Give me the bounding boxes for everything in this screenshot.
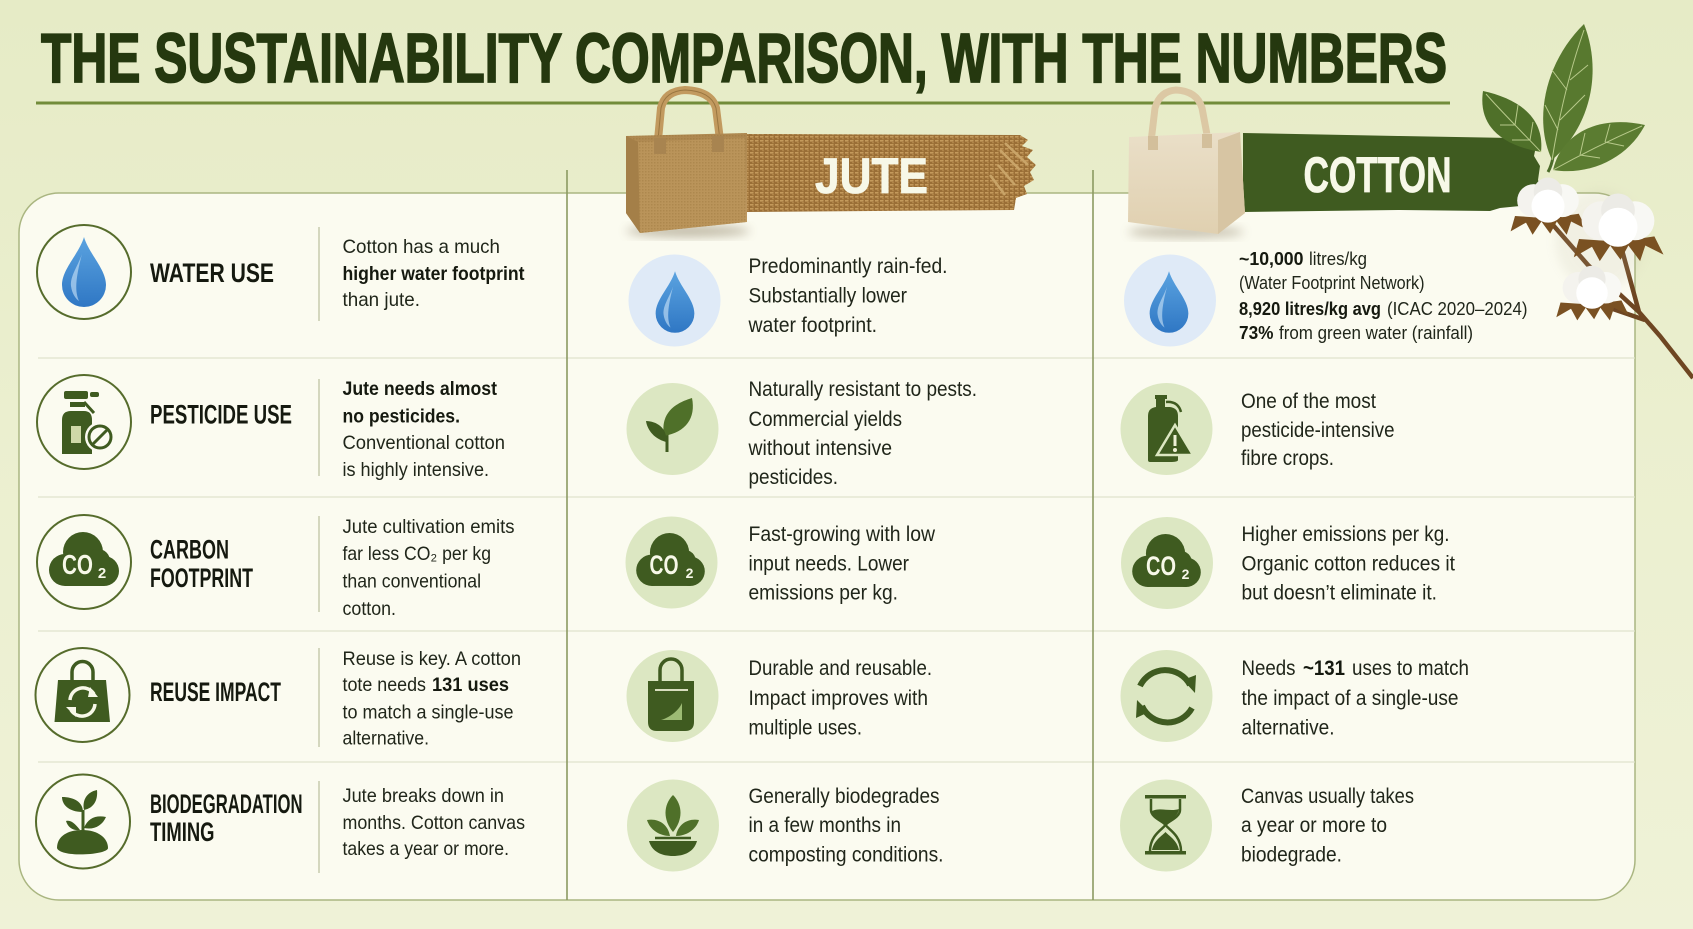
text: reuse summary: tote needs — [342, 674, 426, 696]
text: jute reuse: multiple uses. — [748, 716, 862, 740]
text: cotton reuse: uses to match — [1352, 657, 1469, 680]
banner: cotton green brush strip — [1243, 133, 1541, 212]
icon: hourglass — [1120, 780, 1212, 872]
text: biodegradation summary — [342, 785, 525, 860]
text: cotton pesticide: pesticide-intensive — [1241, 419, 1394, 442]
text: jute pesticide: Naturally resistant to pests. — [748, 378, 977, 401]
icon: spray bottle with no symbol — [37, 375, 131, 469]
text: reuse summary: alternative. — [342, 728, 429, 750]
heading: carbon footprint — [150, 534, 253, 593]
text: jute water: Substantially lower — [748, 284, 907, 308]
text: cotton reuse — [1242, 657, 1469, 740]
heading: carbon footprint: CARBON — [150, 534, 229, 564]
heading: pesticide use: PESTICIDE USE — [150, 400, 292, 430]
icon: water drop — [628, 254, 720, 346]
text: jute carbon — [748, 523, 936, 604]
row: pesticide use label — [37, 375, 505, 481]
icon: canvas tote bag — [1128, 90, 1245, 238]
text: reuse summary: 131 uses — [432, 674, 509, 696]
text: pesticide summary — [342, 378, 505, 481]
icon: CO2 cloud: 2 — [1182, 566, 1190, 582]
text: cotton reuse: ~131 — [1303, 657, 1345, 680]
label: JUTE: JUTE — [815, 148, 928, 204]
text: carbon summary: Jute cultivation emits — [342, 516, 515, 538]
heading: carbon footprint: FOOTPRINT — [150, 563, 253, 593]
text: cotton biodegradation: biodegrade. — [1241, 844, 1342, 866]
icon: water drop — [37, 225, 131, 319]
icon: CO2 cloud — [1121, 517, 1213, 609]
text: cotton carbon: Organic cotton reduces it — [1242, 552, 1455, 576]
text: jute reuse: Durable and reusable. — [748, 657, 932, 680]
text: pesticide summary: Jute needs almost — [342, 378, 497, 400]
cotton cell: pesticide — [1120, 383, 1394, 475]
jute cell: pesticide — [626, 378, 977, 489]
text: jute water: Predominantly rain-fed. — [748, 255, 948, 278]
icon: water drop — [1124, 254, 1216, 346]
text: jute carbon: emissions per kg. — [748, 582, 898, 604]
text: reuse summary: to match a single-use — [342, 702, 514, 724]
icon: CO2 cloud: CO — [62, 549, 93, 580]
row: reuse impact label — [36, 648, 521, 750]
text: cotton carbon: Higher emissions per kg. — [1242, 523, 1450, 546]
text: cotton carbon: but doesn’t eliminate it. — [1242, 582, 1437, 604]
text: biodegradation summary: months. Cotton canvas — [342, 812, 525, 834]
text: cotton biodegradation — [1241, 785, 1414, 866]
text: carbon summary — [342, 516, 515, 620]
text: pesticide summary: Conventional cotton — [342, 432, 505, 454]
text: cotton reuse: Needs — [1242, 657, 1296, 680]
text: cotton reuse: the impact of a single-use — [1242, 687, 1458, 710]
text: pesticide summary: is highly intensive. — [342, 459, 489, 481]
text: pesticide summary: no pesticides. — [342, 406, 460, 428]
icon: jute tote bag — [626, 90, 750, 237]
row: water use label — [37, 225, 525, 319]
cotton cell: biodegradation — [1120, 780, 1414, 872]
text: cotton pesticide — [1241, 390, 1394, 470]
decoration: leaves and cotton branch — [1482, 24, 1693, 378]
text: cotton carbon — [1242, 523, 1455, 604]
text: cotton pesticide: One of the most — [1241, 390, 1376, 413]
text: jute pesticide: without intensive — [748, 437, 892, 460]
text: cotton water figures: litres/kg — [1309, 248, 1367, 269]
jute column header — [626, 90, 1036, 237]
text: reuse summary: Reuse is key. A cotton — [342, 648, 521, 670]
text: cotton water figures: (ICAC 2020–2024) — [1387, 298, 1528, 319]
text: jute biodegradation: composting conditions. — [748, 844, 944, 866]
icon: CO2 cloud: 2 — [98, 565, 106, 582]
text: cotton biodegradation: Canvas usually takes — [1241, 785, 1414, 808]
text: biodegradation summary: takes a year or more. — [342, 838, 509, 860]
heading: biodegradation timing — [150, 789, 302, 847]
jute cell: biodegradation — [627, 780, 944, 872]
cotton cell: reuse — [1120, 650, 1469, 742]
text: cotton biodegradation: a year or more to — [1241, 814, 1387, 837]
icon: bag with recycle arrows — [36, 648, 130, 742]
text: jute water — [748, 255, 948, 337]
banner: jute burlap strip — [745, 134, 1036, 212]
text: cotton water figures: 73% — [1239, 322, 1274, 343]
text: biodegradation summary: Jute breaks down in — [342, 785, 504, 807]
text: cotton reuse: alternative. — [1242, 716, 1334, 740]
icon: pesticide bottle with warning — [1120, 383, 1212, 475]
cotton cell: carbon — [1121, 517, 1455, 609]
text: jute pesticide: pesticides. — [748, 466, 838, 489]
branch — [1553, 225, 1693, 378]
heading: reuse impact: REUSE IMPACT — [150, 677, 281, 707]
text: cotton water figures — [1239, 248, 1528, 343]
cotton column header — [1128, 90, 1541, 238]
jute cell: reuse — [626, 650, 932, 742]
text: jute reuse: Impact improves with — [748, 687, 928, 710]
heading: water use: WATER USE — [150, 258, 274, 288]
text: cotton pesticide: fibre crops. — [1241, 447, 1334, 470]
text: jute water: water footprint. — [748, 314, 877, 337]
text: water summary — [342, 236, 525, 311]
icon: CO2 cloud — [626, 516, 718, 608]
text: water summary: Cotton has a much — [342, 236, 500, 258]
text: cotton water figures: (Water Footprint Network) — [1239, 272, 1424, 293]
text: jute biodegradation: in a few months in — [748, 814, 901, 837]
text: cotton water figures: from green water (rainfall) — [1279, 322, 1473, 343]
cotton cell: water — [1124, 248, 1528, 346]
text: carbon summary: cotton. — [342, 598, 396, 620]
icon: seedling — [626, 383, 718, 475]
text: jute biodegradation — [748, 785, 944, 866]
text: reuse summary — [342, 648, 521, 750]
label: COTTON: COTTON — [1304, 147, 1452, 203]
leaves — [1482, 24, 1645, 172]
icon: CO2 cloud: CO — [1146, 551, 1176, 581]
heading: biodegradation timing: BIODEGRADATION — [150, 789, 302, 819]
text: cotton water figures: ~10,000 — [1239, 248, 1304, 269]
heading: biodegradation timing: TIMING — [150, 817, 214, 847]
text: water summary: than jute. — [342, 289, 420, 311]
jute cell: water — [628, 254, 948, 346]
icon: sprout in soil — [36, 774, 130, 868]
icon: CO2 cloud: CO — [650, 550, 678, 580]
text: jute carbon: Fast-growing with low — [748, 523, 936, 546]
row: carbon footprint label — [37, 515, 515, 620]
text: jute pesticide — [748, 378, 977, 489]
icon: durable bag — [626, 650, 718, 742]
cotton bolls — [1511, 178, 1664, 320]
panel: comparison table — [19, 193, 1635, 900]
text: carbon summary: than conventional — [342, 570, 481, 592]
icon: CO2 cloud: 2 — [686, 565, 694, 581]
text: jute reuse — [748, 657, 932, 740]
icon: circular arrows — [1120, 650, 1212, 742]
text: jute carbon: input needs. Lower — [748, 552, 909, 576]
row: biodegradation timing label — [36, 774, 525, 868]
text: jute pesticide: Commercial yields — [748, 408, 902, 431]
text: cotton water figures: 8,920 litres/kg avg — [1239, 298, 1381, 319]
text: carbon summary: far less CO₂ per kg — [342, 543, 491, 565]
text: jute biodegradation: Generally biodegrades — [748, 785, 940, 808]
icon: CO2 cloud — [37, 515, 131, 609]
jute cell: carbon — [626, 516, 936, 608]
icon: plant in bowl — [627, 780, 719, 872]
text: water summary: higher water footprint — [342, 263, 525, 285]
